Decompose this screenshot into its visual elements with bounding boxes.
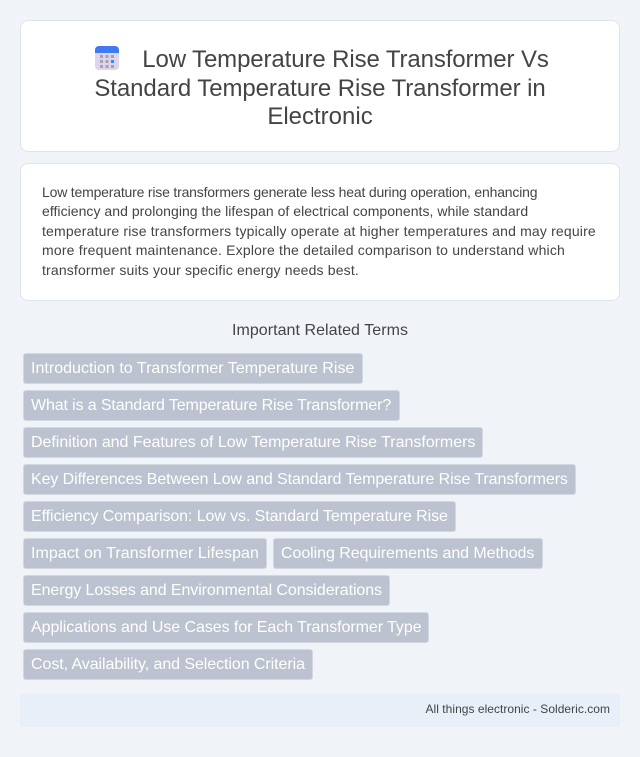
tag	[23, 612, 429, 643]
tag	[23, 390, 400, 421]
title: Standard Temperature Rise Transformer in	[94, 75, 546, 102]
tag	[23, 464, 576, 495]
tag: Impact on Transformer Lifespan	[31, 545, 259, 562]
related terms tags	[23, 353, 576, 680]
title: Electronic	[267, 103, 373, 130]
tag: Definition and Features of Low Temperature Rise Transformers	[31, 434, 475, 451]
description card	[20, 163, 620, 301]
tag	[23, 538, 267, 569]
description text: Low temperature rise transformers generate less heat during operation, enhancing	[42, 184, 537, 200]
title	[94, 46, 549, 130]
tag: Efficiency Comparison: Low vs. Standard Temperature Rise	[31, 508, 448, 525]
icon: calendar	[95, 46, 119, 70]
description text	[42, 184, 596, 278]
tag: Applications and Use Cases for Each Transformer Type	[31, 619, 422, 636]
tag	[23, 575, 390, 606]
tag: Energy Losses and Environmental Considerations	[31, 582, 382, 599]
title card	[20, 20, 620, 152]
tag: Key Differences Between Low and Standard Temperature Rise Transformers	[31, 471, 568, 488]
tag	[23, 353, 363, 384]
tag	[23, 427, 483, 458]
footer: All things electronic - Solderic.com	[426, 702, 610, 716]
description text: transformer suits your specific energy needs best.	[42, 262, 359, 278]
description text: more frequent maintenance. Explore the detailed comparison to understand which	[42, 242, 565, 258]
description text: efficiency and prolonging the lifespan of electrical components, while standard	[42, 203, 528, 219]
tag	[23, 501, 456, 532]
tag: Cost, Availability, and Selection Criteria	[31, 656, 305, 673]
description text: temperature rise transformers typically operate at higher temperatures and may require	[42, 223, 596, 239]
tag: Cooling Requirements and Methods	[281, 545, 534, 562]
footer	[20, 694, 620, 727]
tag	[23, 649, 313, 680]
title: Low Temperature Rise Transformer Vs	[142, 46, 549, 73]
tag: What is a Standard Temperature Rise Transformer?	[31, 397, 391, 414]
tag	[273, 538, 543, 569]
heading: important related terms: Important Related Terms	[232, 322, 408, 339]
tag: Introduction to Transformer Temperature Rise	[31, 360, 354, 377]
